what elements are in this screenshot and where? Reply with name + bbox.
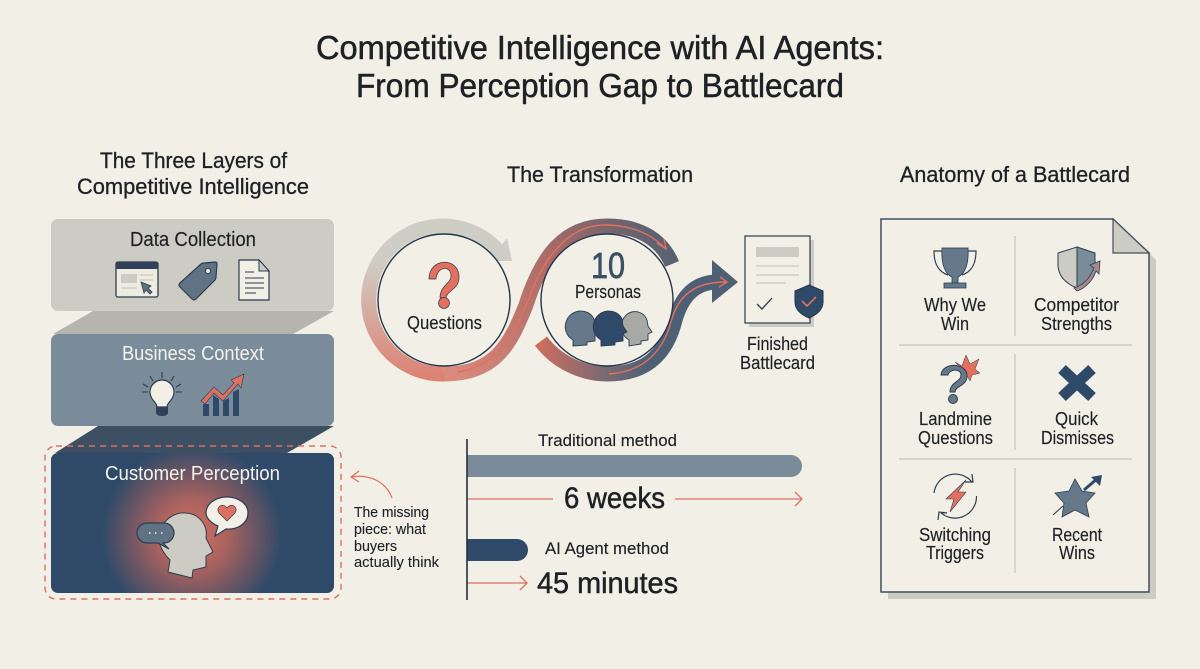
icon: question mark [429,262,459,308]
value: forty-five minutes: 45 minutes [537,567,678,600]
item: competitor strengths: Strengths [1041,314,1112,334]
icon: three heads [565,311,652,346]
layer: data collection: Data Collection [130,229,256,251]
heading: three layers: Competitive Intelligence [77,174,309,199]
circle: questions [378,234,510,366]
item: recent wins [1052,475,1102,563]
item: switching triggers [919,474,991,563]
timeline comparison [467,431,802,600]
layer: business context: Business Context [122,343,264,365]
item: why we win [924,248,986,334]
icon: browser window [116,262,158,297]
annotation: missing piece: piece: what [354,521,427,538]
item: competitor strengths: Competitor [1034,295,1119,315]
item: landmine questions: Landmine [919,409,992,429]
item: quick dismisses: Quick [1055,409,1099,429]
item: quick dismisses [1041,369,1114,448]
heading: anatomy: Anatomy of a Battlecard [900,162,1130,187]
annotation: missing piece [354,504,439,571]
panel: anatomy of a battlecard [881,162,1156,599]
layer: business context [51,334,334,426]
document sheet [881,219,1156,599]
icon: growth chart [201,374,244,416]
layer: data collection [51,219,334,311]
layer: customer perception: Customer Perception [105,463,280,485]
icon: shield [795,285,823,318]
finished battlecard document [745,236,823,327]
panel: transformation [369,162,823,600]
label: finished battlecard: Battlecard [740,353,815,373]
icon: star with arrow [1053,475,1102,517]
title: From Perception Gap to Battlecard [356,67,844,104]
item: competitor strengths [1034,247,1119,334]
icon: X mark [1062,369,1092,397]
panel: three layers [45,148,439,599]
annotation: missing piece: buyers [354,538,397,555]
label: traditional method: Traditional method [538,431,677,450]
heading: transformation: The Transformation [507,162,693,187]
value: six weeks: 6 weeks [564,482,665,515]
arrow: six weeks [467,492,802,506]
item: why we win: Why We [924,295,986,315]
bar: AI agent [467,539,528,561]
item: switching triggers: Switching [919,525,991,545]
item: why we win: Win [941,314,969,334]
connector: data to business [53,311,334,334]
heading: three layers: The Three Layers of [100,148,288,173]
arrow: annotation [351,471,392,498]
connector: business to customer [55,426,334,453]
label: AI agent method: AI Agent method [545,539,669,558]
annotation: missing piece: actually think [354,554,439,571]
label: finished battlecard [740,334,815,373]
axis [466,439,468,600]
ribbon: S curve to personas [444,225,672,374]
icon: shield with arrow [1058,247,1100,291]
label: finished battlecard: Finished [747,334,808,354]
highlight: dashed outline [45,446,341,599]
icon: trophy [934,248,976,288]
arrow: forty-five minutes [467,576,527,590]
item: switching triggers: Triggers [926,543,984,563]
icon: head with speech bubbles [137,497,248,578]
item: recent wins: Wins [1059,543,1095,563]
icon: question with burst [941,355,980,404]
circle: questions: Questions [407,313,482,333]
item: landmine questions [918,355,993,448]
annotation: missing piece: The missing [354,504,429,521]
ribbon: grey to coral loop [369,226,512,374]
item: recent wins: Recent [1052,525,1102,545]
circle: personas [541,234,673,366]
icon: bolt in cycle [934,474,977,520]
item: landmine questions: Questions [918,428,993,448]
icon: light bulb [142,372,182,416]
icon: price tag [179,262,217,300]
circle: personas: Personas [575,282,641,302]
heading: three layers [77,148,309,199]
layer: customer perception [51,453,334,593]
icon: document [239,260,269,300]
title: Competitive Intelligence with AI Agents: [316,29,884,66]
item: quick dismisses: Dismisses [1041,428,1114,448]
ribbon: personas to battlecard [541,260,738,374]
title [316,29,884,104]
bar: traditional [467,455,802,477]
circle: personas: 10 [591,245,625,286]
